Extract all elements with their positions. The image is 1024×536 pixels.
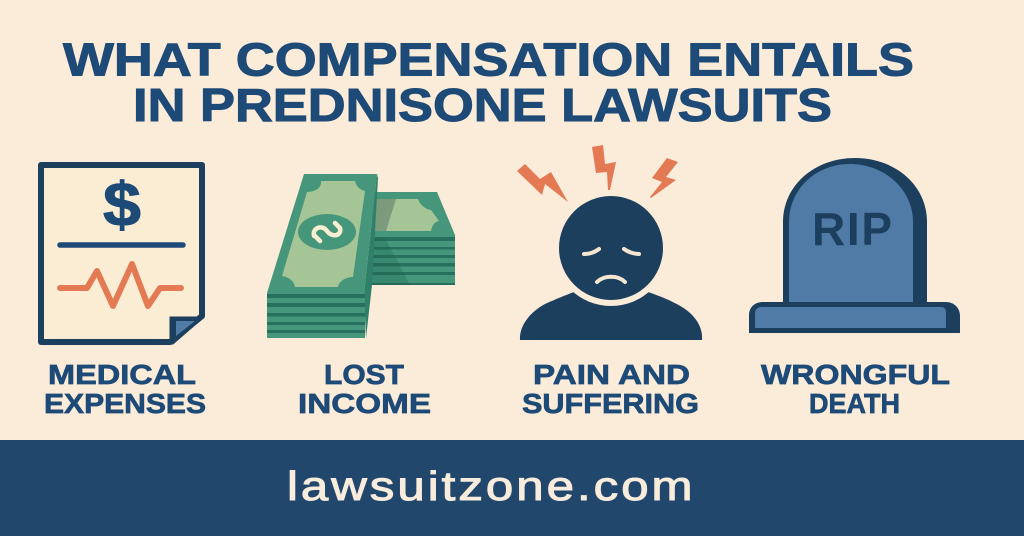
dollar sign: $ bbox=[103, 170, 141, 239]
icon: medical bill bbox=[41, 165, 204, 344]
label: lost income: LOST bbox=[324, 359, 404, 390]
icon: person in pain bbox=[517, 145, 702, 340]
icon: stacks of money bbox=[267, 174, 455, 338]
website url: lawsuitzone.com bbox=[287, 463, 696, 509]
label: pain and suffering: SUFFERING bbox=[522, 388, 699, 419]
label: medical expenses: EXPENSES bbox=[44, 388, 206, 419]
label: wrongful death: WRONGFUL bbox=[761, 359, 950, 390]
label: wrongful death: DEATH bbox=[809, 388, 900, 419]
label: wrongful death bbox=[761, 359, 950, 419]
title: WHAT COMPENSATION ENTAILS bbox=[63, 34, 914, 86]
labels bbox=[44, 359, 950, 419]
label: lost income bbox=[298, 359, 431, 419]
RIP text: RIP bbox=[812, 203, 892, 255]
label: lost income: INCOME bbox=[298, 388, 431, 419]
dollar symbol on bill bbox=[314, 223, 340, 241]
label: medical expenses: MEDICAL bbox=[48, 359, 196, 390]
label: pain and suffering bbox=[522, 359, 699, 419]
title bbox=[63, 34, 914, 131]
label: medical expenses bbox=[44, 359, 206, 419]
label: pain and suffering: PAIN AND bbox=[533, 359, 690, 390]
footer band bbox=[0, 440, 1024, 536]
title: IN PREDNISONE LAWSUITS bbox=[133, 79, 832, 131]
icon: tombstone bbox=[749, 158, 960, 333]
